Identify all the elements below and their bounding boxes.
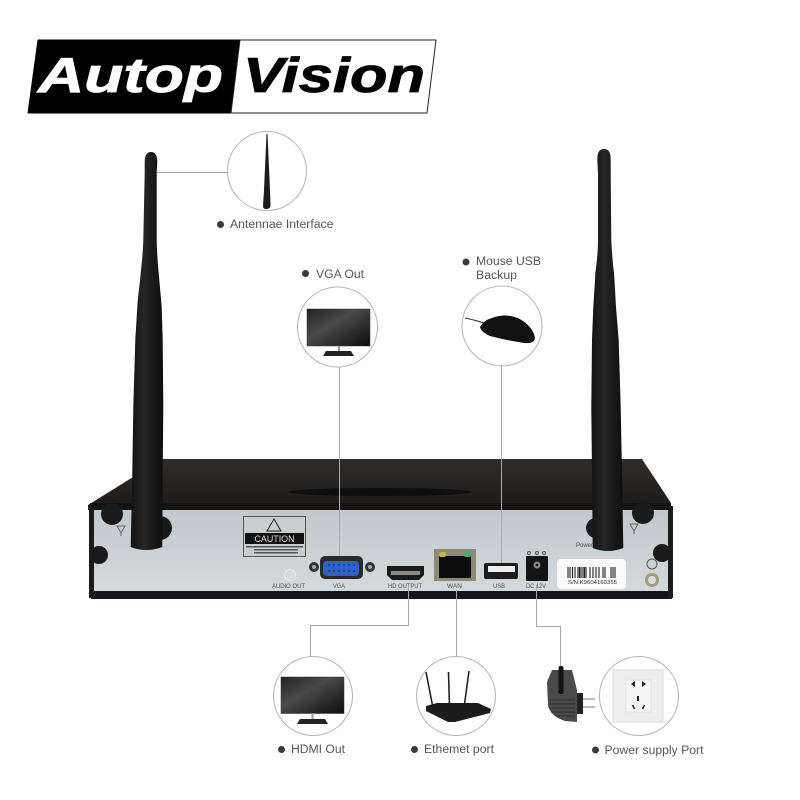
label: HDMI Out bbox=[291, 744, 346, 756]
label: Backup bbox=[476, 270, 517, 282]
port labels: WAN bbox=[447, 584, 462, 590]
circle bbox=[462, 286, 542, 366]
mounting nuts bbox=[90, 502, 671, 564]
port labels: VGA bbox=[333, 584, 345, 590]
bullet bbox=[278, 746, 285, 753]
connector lines bbox=[157, 172, 560, 668]
caution label: CAUTION bbox=[254, 534, 294, 544]
wan ethernet port bbox=[434, 549, 476, 581]
circle bbox=[416, 656, 496, 736]
caution label bbox=[244, 516, 306, 556]
callout: power supply port bbox=[547, 656, 704, 757]
circle bbox=[298, 287, 378, 367]
bullet bbox=[411, 746, 418, 753]
circle bbox=[600, 656, 678, 736]
antenna symbols bbox=[117, 524, 638, 536]
usb port bbox=[484, 563, 518, 579]
dc power jack bbox=[526, 552, 548, 581]
icon: monitor bbox=[307, 309, 370, 356]
bottom rim bbox=[91, 591, 672, 599]
top panel glare bbox=[288, 488, 472, 496]
bullet bbox=[302, 270, 309, 277]
grounding screw bbox=[645, 573, 659, 587]
hdmi port bbox=[387, 566, 424, 580]
port labels: Power bbox=[576, 543, 593, 549]
audio out jack bbox=[284, 570, 296, 580]
serial number sticker: S/N:K9604160355 bbox=[568, 580, 617, 586]
serial number sticker bbox=[557, 559, 626, 589]
label: Antennae Interface bbox=[230, 219, 334, 231]
callout: mouse usb backup bbox=[462, 256, 542, 366]
device top panel bbox=[88, 459, 671, 510]
left antenna bbox=[131, 152, 163, 550]
label: Mouse USB bbox=[476, 256, 541, 268]
circle bbox=[228, 132, 306, 210]
device: NVR recorder body bbox=[88, 459, 673, 599]
right edge bbox=[668, 506, 673, 598]
logo: AutopVision: Autop bbox=[37, 49, 223, 103]
logo: AutopVision bbox=[28, 40, 436, 113]
logo: AutopVision: Vision bbox=[243, 49, 425, 103]
callout: hdmi out bbox=[274, 656, 352, 756]
icon: router bbox=[426, 671, 491, 722]
front top band bbox=[90, 503, 671, 510]
bullet bbox=[217, 221, 224, 228]
label: Power supply Port bbox=[604, 745, 704, 757]
port labels: HD OUTPUT bbox=[388, 584, 422, 590]
callout: antennae interface bbox=[217, 132, 334, 231]
port labels bbox=[272, 543, 593, 590]
icon: mouse bbox=[465, 316, 535, 343]
bullet bbox=[592, 746, 599, 754]
icon: antenna bbox=[263, 134, 270, 209]
left edge bbox=[89, 506, 94, 598]
callout: vga out bbox=[298, 269, 378, 367]
label: VGA Out bbox=[316, 269, 365, 281]
vga port bbox=[309, 556, 375, 579]
front face bbox=[90, 508, 672, 592]
port labels: USB bbox=[493, 584, 505, 590]
icon: monitor bbox=[281, 677, 344, 724]
right antenna bbox=[591, 149, 623, 551]
circle bbox=[274, 656, 352, 736]
icon: power adapter bbox=[547, 666, 595, 722]
bullet bbox=[462, 258, 470, 266]
callout: ethernet port bbox=[411, 656, 496, 756]
ground symbol bbox=[647, 559, 657, 569]
icon: wall socket bbox=[613, 670, 663, 722]
label: Ethemet port bbox=[424, 744, 495, 756]
port labels: AUDIO OUT bbox=[272, 584, 305, 590]
port labels: DC 12V bbox=[526, 584, 546, 590]
